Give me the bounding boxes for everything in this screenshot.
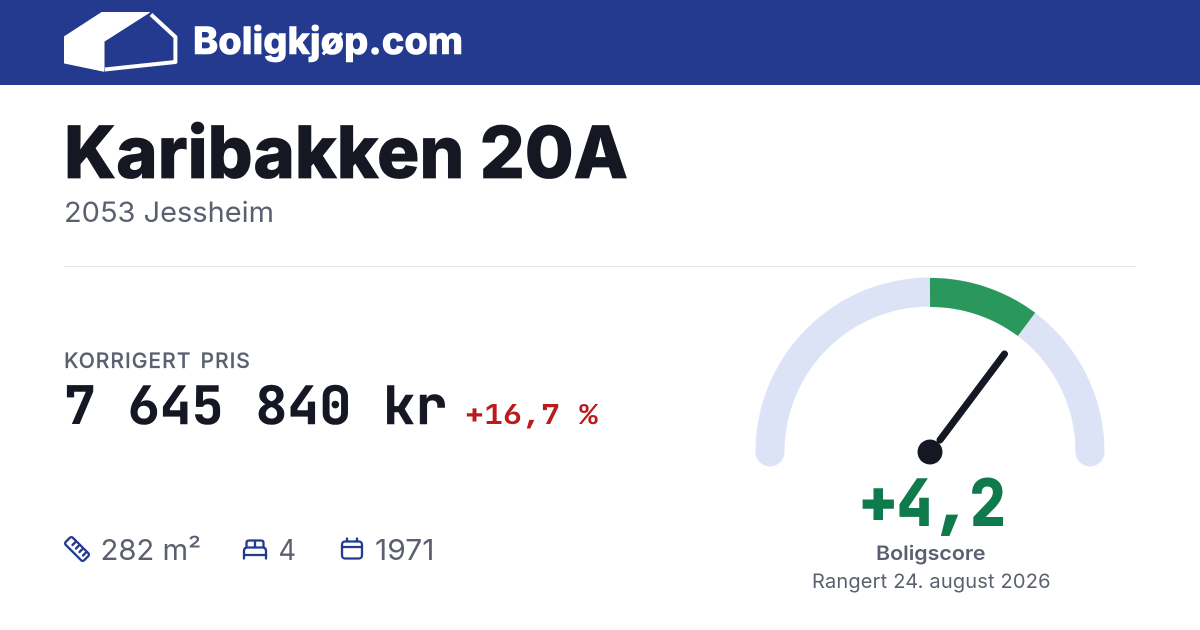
- property stats row: [64, 532, 434, 567]
- logo wordmark: Boligkjøp.com: [193, 18, 463, 64]
- icon: calendar: [342, 538, 362, 558]
- stat: year built: 1971: [375, 532, 434, 567]
- price value: 7 645 840 kr: [64, 370, 447, 440]
- ranking date: Rangert 24. august 2026: [812, 569, 1050, 593]
- gauge value arc: [930, 292, 1026, 324]
- price label: KORRIGERT: [64, 349, 191, 374]
- score gauge: [770, 292, 1090, 464]
- icon: house logo: [64, 12, 175, 71]
- stat: bedrooms: 4: [278, 532, 296, 567]
- gauge track: [770, 292, 1090, 452]
- icon: bed: [244, 540, 266, 558]
- score value: +4,2: [860, 462, 1006, 544]
- title: Karibakken 20A: [64, 109, 628, 196]
- gauge hub: [918, 440, 942, 464]
- gauge needle: [940, 354, 1004, 440]
- price block: [64, 349, 598, 440]
- price change: +16,7 %: [465, 396, 598, 433]
- price label: PRIS: [200, 349, 251, 374]
- header bar: [0, 0, 1200, 85]
- subtitle: postal address: 2053 Jessheim: [64, 195, 274, 229]
- stat: area: 282 m²: [100, 532, 201, 567]
- score label: Boligscore: [876, 541, 986, 565]
- icon: ruler: [64, 536, 90, 562]
